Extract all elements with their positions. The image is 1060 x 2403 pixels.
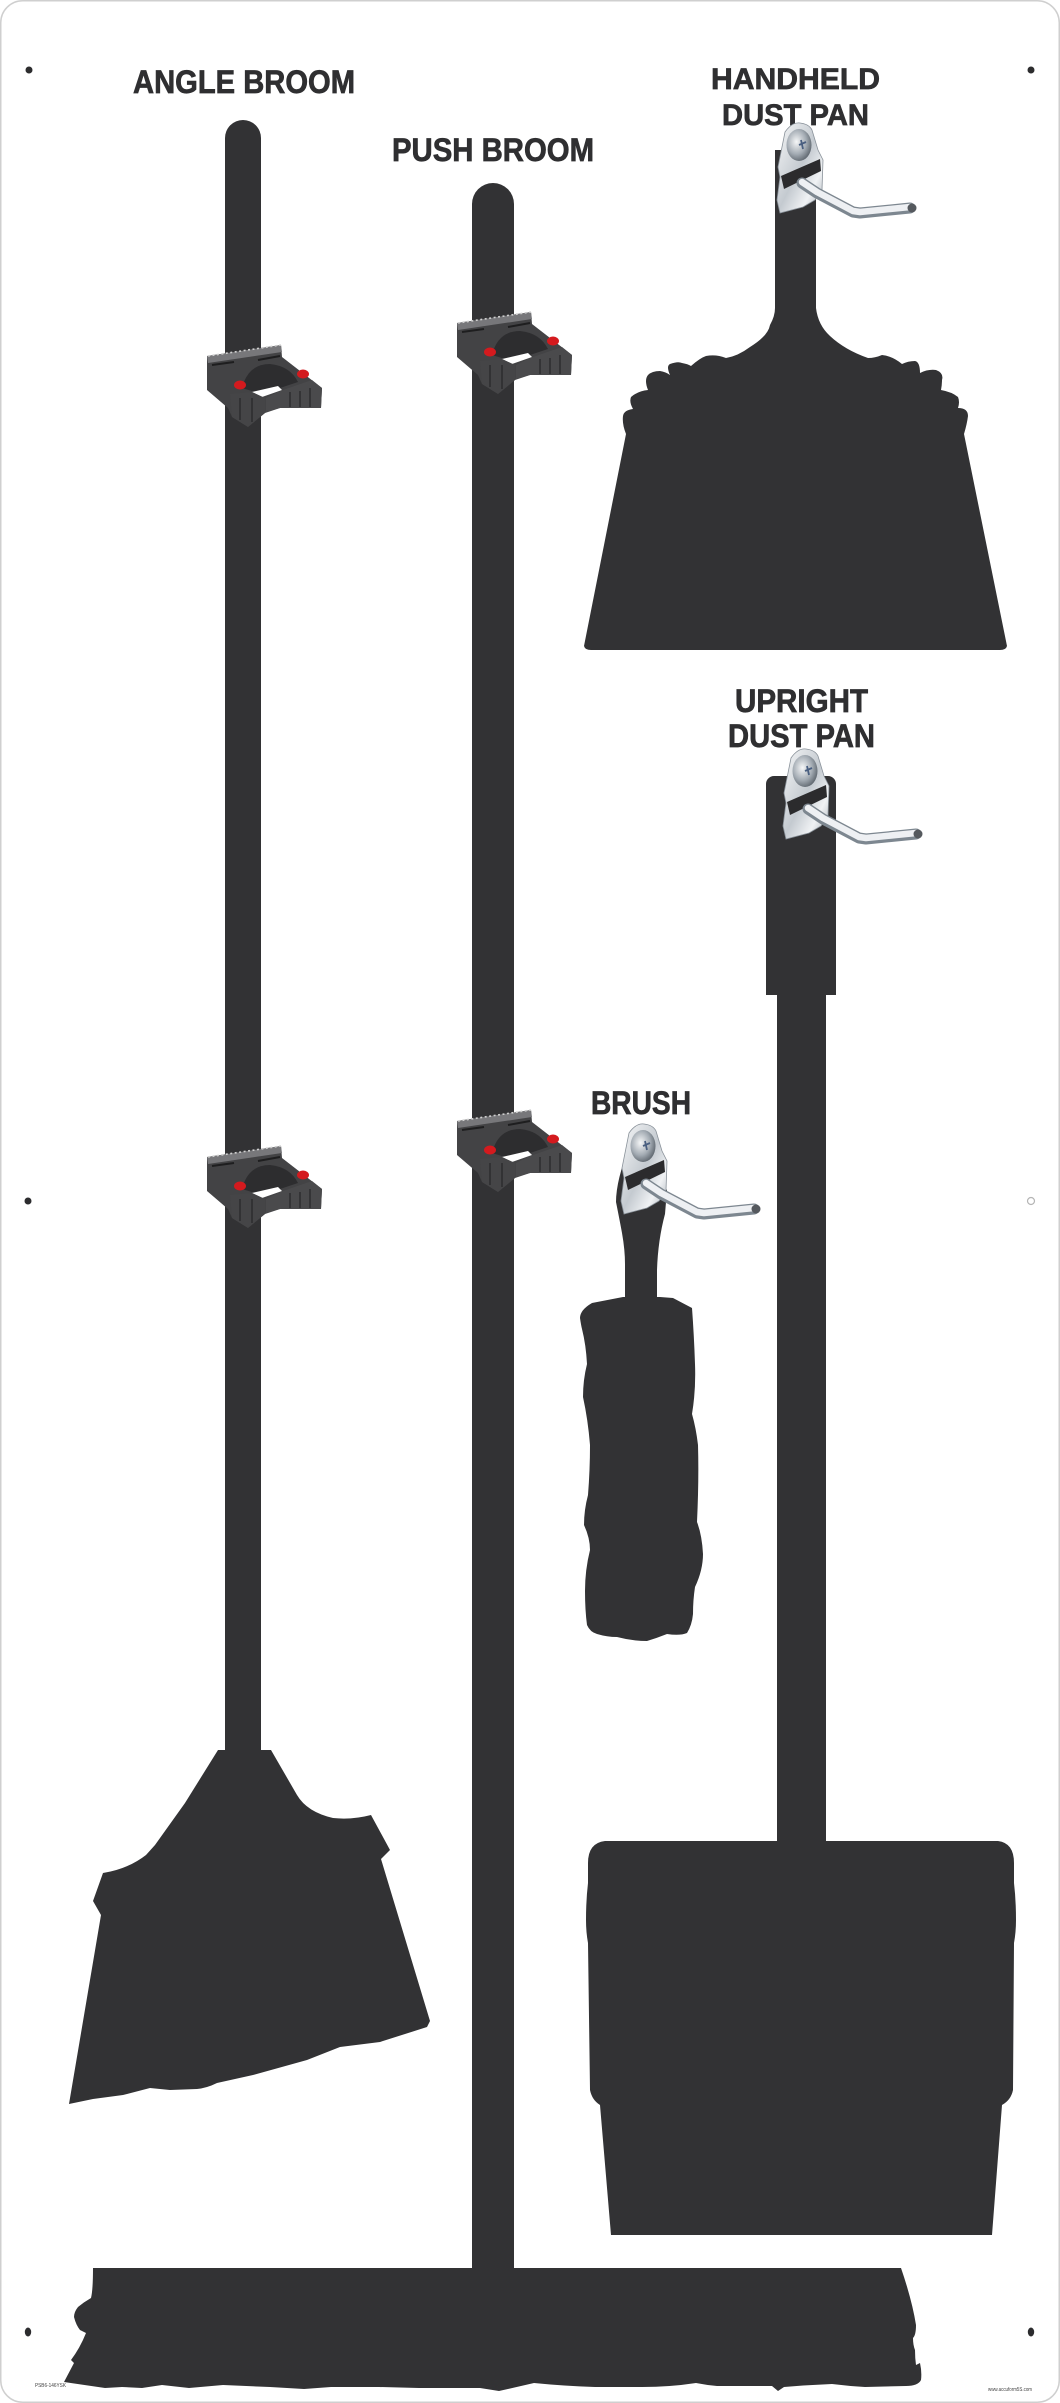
clamp: push broom lower — [457, 1110, 572, 1192]
heading: brush: BRUSH — [591, 1085, 691, 1121]
heading: angle broom: ANGLE BROOM — [133, 64, 355, 100]
heading: handheld dust pan: DUST PAN — [722, 99, 869, 132]
silhouette: upright dust pan — [586, 776, 1016, 2235]
clamp: push broom upper — [457, 312, 572, 394]
heading: upright dust pan: DUST PAN — [728, 718, 875, 754]
silhouette: angle broom — [69, 120, 430, 2104]
silhouette: brush — [580, 1145, 703, 1641]
heading: push broom: PUSH BROOM — [392, 132, 594, 168]
hook: upright dust pan — [783, 749, 922, 839]
clamp: angle broom upper — [207, 345, 322, 427]
heading: upright dust pan: UPRIGHT — [735, 683, 868, 719]
clamp: angle broom lower — [207, 1146, 322, 1228]
heading: handheld dust pan: HANDHELD — [711, 63, 880, 96]
hook: handheld dust pan — [777, 123, 916, 213]
silhouette: push broom — [64, 183, 921, 2391]
hook: brush — [621, 1124, 760, 1214]
part number: PSB6-146YSK — [35, 2383, 67, 2389]
website: www.accuform5S.com — [988, 2387, 1032, 2393]
silhouette: handheld dust pan — [584, 150, 1007, 650]
